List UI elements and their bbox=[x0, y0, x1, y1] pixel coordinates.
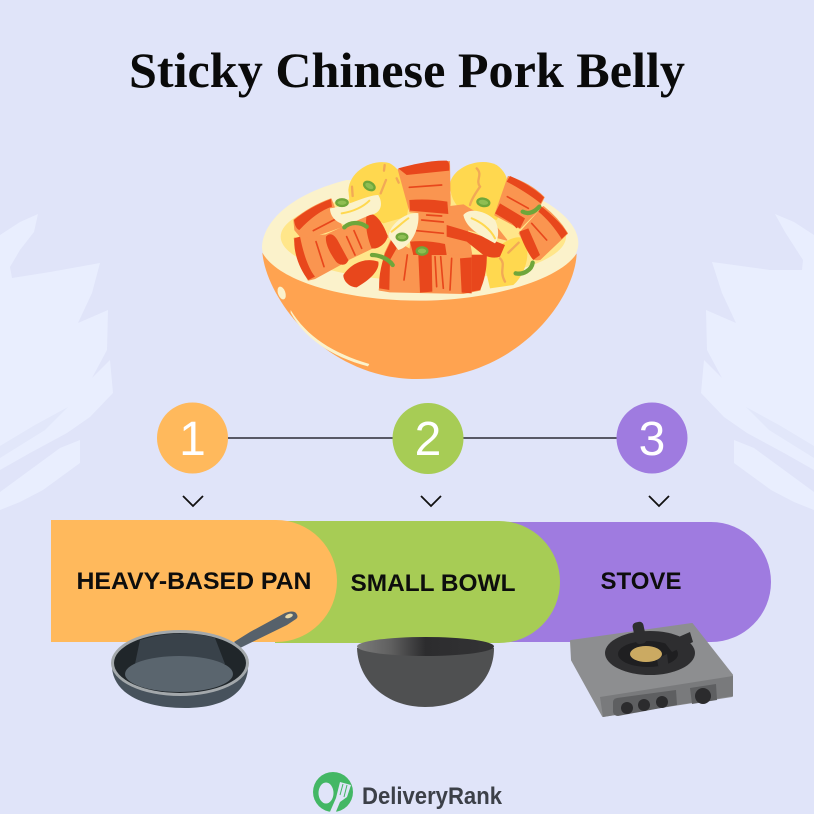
band: heavy-based pan: HEAVY-BASED PAN bbox=[76, 568, 312, 595]
logo: DeliveryRank: DeliveryRank bbox=[362, 783, 503, 810]
band: small bowl: SMALL BOWL bbox=[350, 570, 516, 597]
background brush left bbox=[0, 214, 113, 510]
icon: gas stove bbox=[571, 621, 733, 717]
illustration: pork belly bowl bbox=[262, 161, 578, 379]
egg whites bbox=[330, 195, 498, 250]
icon: small bowl bbox=[357, 637, 494, 707]
icon: frying pan bbox=[111, 612, 298, 708]
step 3 badge: 3 bbox=[639, 413, 665, 466]
pork slices: fat layer bbox=[294, 162, 567, 293]
background brush right bbox=[701, 214, 814, 510]
connector line bbox=[193, 437, 652, 439]
step 1 badge bbox=[157, 402, 228, 474]
chevron 2 bbox=[421, 496, 441, 506]
green onions bbox=[336, 180, 539, 274]
potatoes bbox=[348, 162, 527, 288]
chevron 3 bbox=[649, 496, 669, 506]
step 3 badge bbox=[616, 402, 688, 474]
band: stove: STOVE bbox=[601, 568, 681, 595]
band: small bowl bbox=[275, 521, 560, 643]
step 2 badge: 2 bbox=[415, 413, 441, 466]
chevron 1 bbox=[183, 496, 203, 506]
title: Sticky Chinese Pork Belly bbox=[129, 42, 685, 98]
logo icon: green ring with spoon and fork bbox=[313, 772, 353, 814]
band: stove bbox=[500, 522, 771, 642]
pork slices: fine stripes bbox=[313, 185, 547, 290]
logo: DeliveryRank bbox=[313, 772, 503, 814]
step 2 badge bbox=[392, 403, 464, 474]
step 1 badge: 1 bbox=[179, 413, 206, 466]
bowl highlights bbox=[276, 285, 369, 366]
band: heavy-based pan bbox=[51, 520, 337, 642]
bowl rim bbox=[262, 180, 578, 301]
potato seasoning streaks bbox=[352, 165, 519, 282]
pork slices: red meat bbox=[294, 161, 567, 293]
egg yolk streaks bbox=[342, 201, 495, 238]
bowl body bbox=[262, 253, 577, 379]
